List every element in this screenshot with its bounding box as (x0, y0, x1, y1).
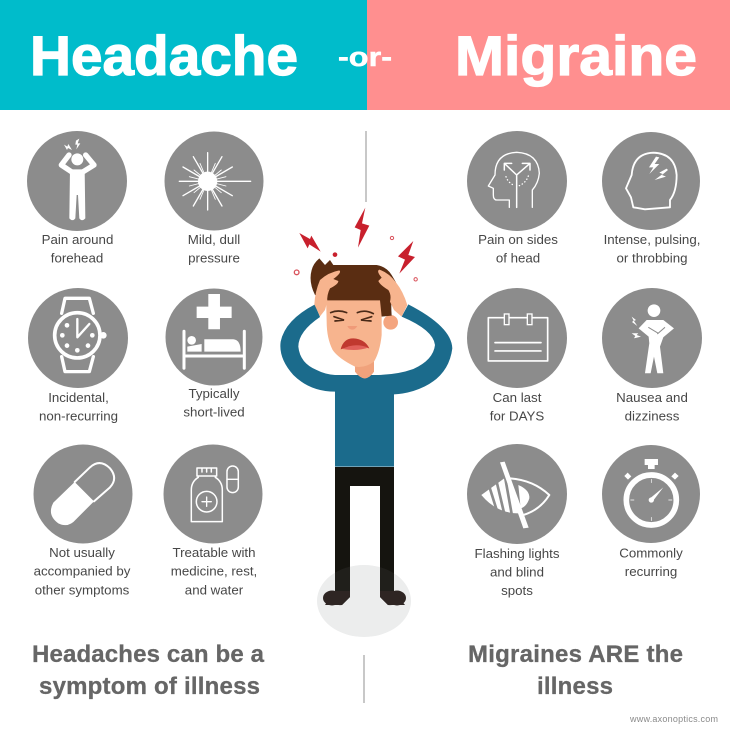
label: recurring (625, 564, 677, 579)
icon: stopwatch (602, 445, 700, 543)
symptom: intense pulsing (602, 132, 700, 266)
icon: wristwatch (28, 288, 128, 388)
label: pressure (188, 251, 240, 266)
label: medicine, rest, (171, 564, 257, 579)
icon: light burst (164, 132, 264, 230)
illustration: man with headache (280, 208, 452, 637)
icon: person holding stomach (602, 288, 702, 388)
left hand (314, 270, 340, 316)
panel: headache symptoms (27, 131, 264, 597)
symptom: not accompanied (34, 444, 132, 597)
symptom: nausea (602, 288, 702, 424)
icon: capsule pill (34, 444, 132, 544)
hair (311, 258, 396, 317)
label: and water (185, 582, 244, 597)
takeaway: headaches: Headaches can be a (32, 641, 265, 668)
label: Incidental, (48, 390, 109, 405)
label: Pain around (42, 232, 113, 247)
label: spots (501, 583, 533, 598)
face (326, 295, 382, 378)
label: or throbbing (617, 251, 687, 266)
symptom: lasts for days (467, 288, 567, 424)
label: non-recurring (39, 408, 118, 424)
symptom: flashing lights (467, 444, 567, 598)
expression (331, 311, 373, 321)
legs and feet (323, 467, 406, 606)
takeaway: headaches: symptom of illness (39, 673, 260, 700)
label: Mild, dull (188, 232, 240, 247)
title: Migraine: Migraine (455, 24, 697, 87)
label: Intense, pulsing, (604, 232, 700, 247)
symptom: commonly recurring (602, 445, 700, 579)
label: Typically (188, 386, 240, 401)
icon: crossed-out eye (467, 444, 567, 544)
label: forehead (51, 251, 103, 266)
label: of head (496, 251, 540, 266)
icon: person holding head (27, 131, 127, 231)
symptom: treatable (164, 444, 262, 597)
label: short-lived (183, 404, 245, 420)
title: Headache: Headache (30, 24, 298, 87)
label: for DAYS (490, 408, 544, 424)
label: Pain on sides (478, 232, 558, 247)
floor shadow (317, 565, 411, 637)
icon: head with lightning (602, 132, 700, 230)
takeaway: migraines: Migraines ARE the (468, 641, 683, 668)
nose (347, 326, 357, 330)
icon: calendar (467, 288, 567, 388)
shadow overlap on legs (317, 565, 411, 637)
label: Not usually (49, 545, 115, 560)
torso and arms (280, 304, 452, 467)
icon: medicine bottle and pill (164, 444, 262, 544)
label: accompanied by (34, 564, 131, 579)
label: Flashing lights (474, 546, 560, 561)
symptom: pain around forehead (27, 131, 127, 266)
icon: medical cross and bed (166, 288, 262, 386)
label: Treatable with (172, 545, 256, 560)
mouth (341, 338, 369, 349)
symptom: incidental (28, 288, 128, 424)
label: Can last (493, 390, 542, 405)
symptom: pain on sides (467, 131, 567, 266)
symptom: mild dull pressure (164, 132, 264, 266)
title: or: -or- (338, 42, 392, 72)
label: and blind (490, 565, 544, 580)
label: Commonly (619, 546, 683, 560)
label: dizziness (625, 408, 680, 424)
pain bolts and dots (299, 208, 415, 274)
right hand (378, 270, 407, 317)
label: Nausea and (616, 390, 688, 405)
ear (383, 315, 398, 330)
website credit: www.axonoptics.com (629, 714, 718, 724)
icon: head with arrows (467, 131, 567, 231)
panel: migraine symptoms (467, 131, 702, 598)
symptom: short-lived (166, 288, 262, 420)
header banner (0, 0, 730, 110)
takeaway: migraines: illness (537, 673, 613, 700)
label: other symptoms (35, 582, 130, 597)
